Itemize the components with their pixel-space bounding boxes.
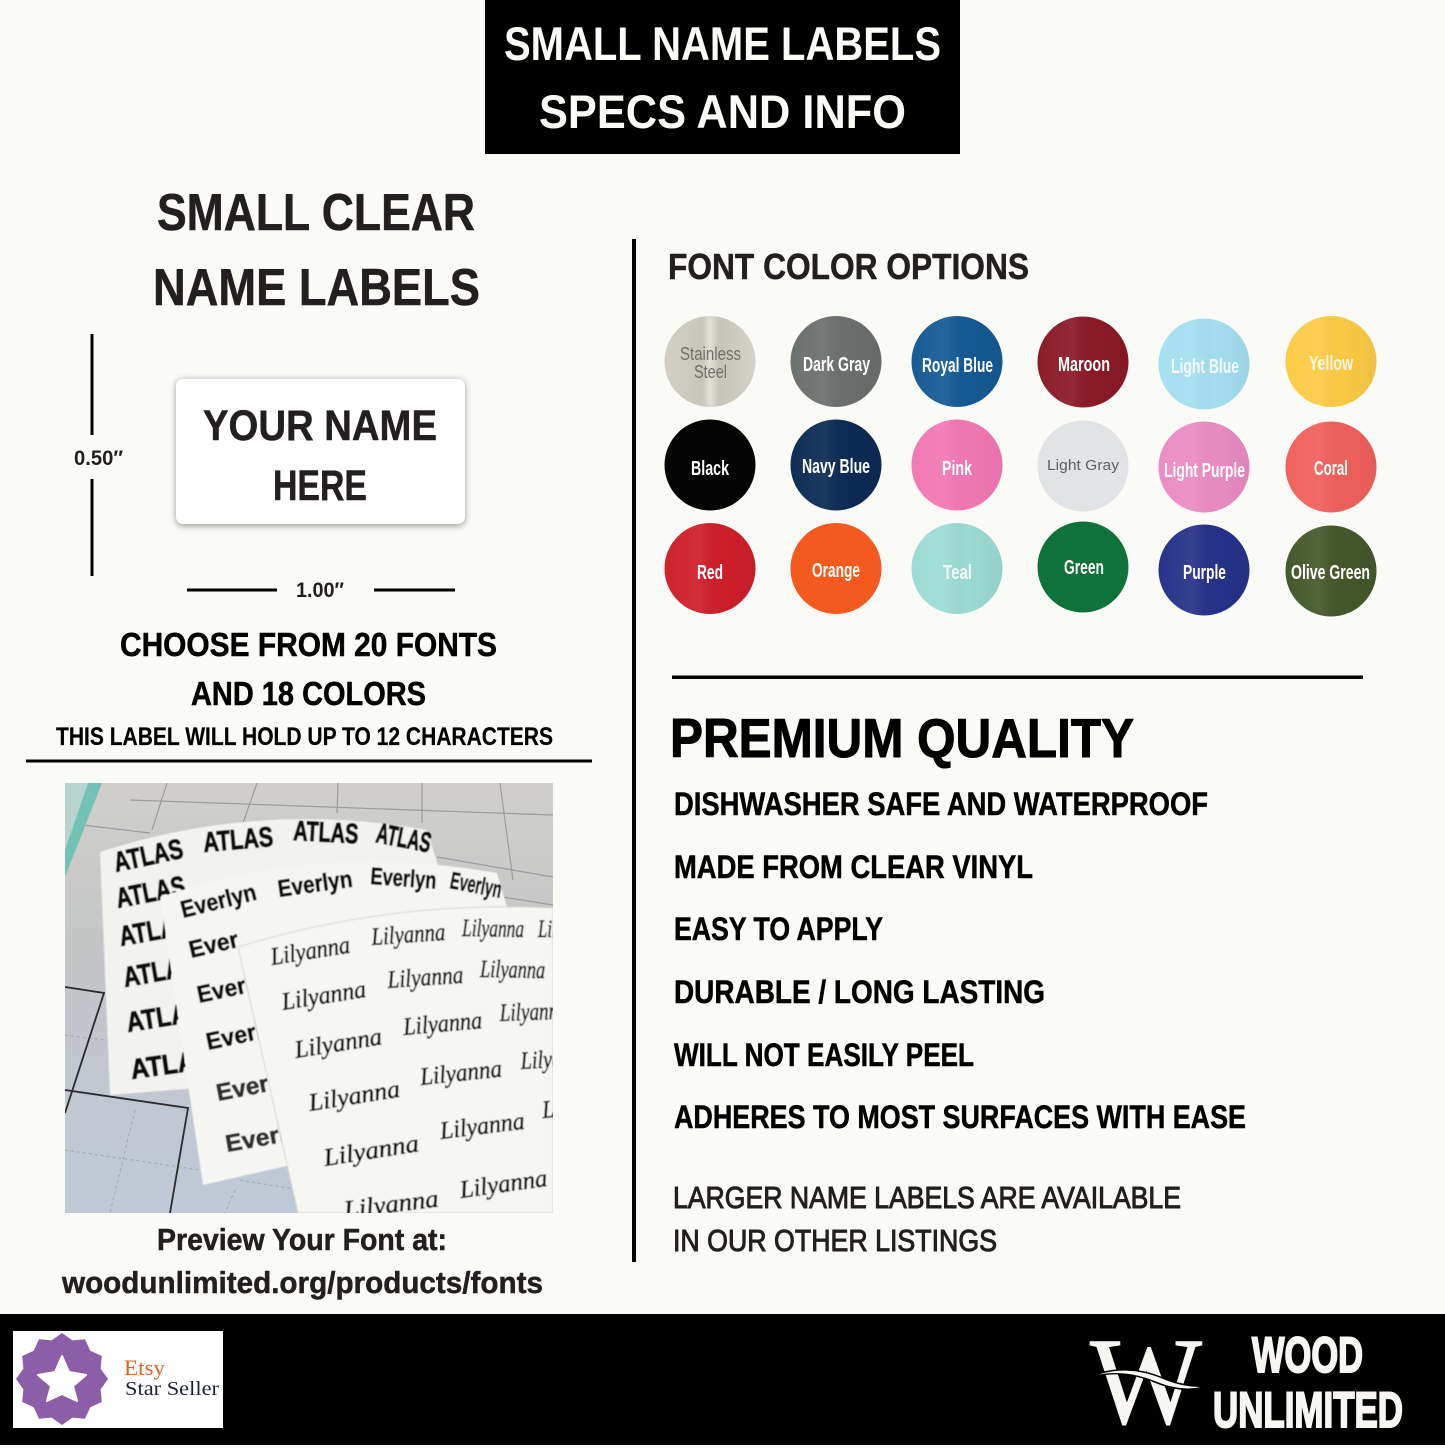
- swatch: Coral: [1286, 422, 1376, 512]
- ruler corner: [65, 783, 102, 877]
- swatch: Stainless Steel: Stainless: [680, 344, 741, 364]
- wood unlimited logo: WOOD: [1252, 1327, 1363, 1383]
- sheet: Everlyn: Everlyn: [195, 965, 280, 1009]
- sheet: ATLAS: ATLAS: [374, 817, 434, 858]
- sheet: Everlyn: Ever: [186, 926, 241, 964]
- sheet: Everlyn: Everlyn: [276, 866, 354, 903]
- swatch: Olive Green: Olive Green: [1291, 562, 1370, 584]
- swatch: Purple: Purple: [1183, 562, 1226, 584]
- swatch: Green: [1038, 522, 1128, 612]
- sheet: Everlyn: [159, 864, 507, 1186]
- icon: W monogram with swoosh: W: [1090, 1313, 1202, 1448]
- etsy star seller badge: Star Seller: [125, 1378, 219, 1400]
- sheet: Lilyanna: Lilyanna: [386, 962, 464, 994]
- larger labels note: [673, 1180, 1181, 1258]
- width dimension 1.00 inch: [187, 579, 455, 602]
- font preview link text: Preview Your Font at:: [157, 1222, 447, 1257]
- swatch: Royal Blue: Royal Blue: [922, 355, 993, 377]
- left heading: SMALL CLEAR: [157, 184, 475, 242]
- title banner: [485, 0, 960, 154]
- height dimension 0.50 inch: [74, 334, 123, 576]
- larger labels note: LARGER NAME LABELS ARE AVAILABLE: [673, 1180, 1181, 1215]
- label sample card: [176, 379, 465, 526]
- swatch: Yellow: Yellow: [1309, 353, 1353, 375]
- larger labels note: IN OUR OTHER LISTINGS: [673, 1223, 997, 1258]
- icon: purple star badge: [16, 1333, 108, 1425]
- sheet: Lilyanna: Lilyanna: [519, 1044, 593, 1075]
- sheet: ATLAS: ATLAS: [293, 815, 359, 849]
- label sample card: YOUR NAME: [203, 402, 437, 450]
- feature list: EASY TO APPLY: [674, 911, 883, 947]
- swatch: Teal: Teal: [943, 562, 972, 584]
- swatch: Purple: [1158, 524, 1250, 616]
- sheet: Everlyn: Everlyn: [178, 879, 259, 924]
- sheet: Lilyanna: Lilyanna: [479, 956, 545, 984]
- fonts and colors text: [56, 626, 553, 751]
- feature list: MADE FROM CLEAR VINYL: [674, 849, 1033, 885]
- label sample card: HERE: [273, 462, 367, 510]
- fonts and colors text: AND 18 COLORS: [191, 675, 426, 712]
- swatch: Black: [664, 420, 756, 510]
- font color heading: FONT COLOR OPTIONS: [668, 246, 1029, 287]
- swatch: Light Purple: [1158, 422, 1250, 512]
- swatch: Teal: [912, 523, 1002, 614]
- sheet: ATLAS: ATLAS: [117, 909, 193, 952]
- sheet: Lilyanna: Lilyanna: [537, 916, 598, 943]
- etsy star seller badge: Etsy: [124, 1355, 165, 1380]
- left heading: NAME LABELS: [153, 259, 480, 317]
- sheet: ATLAS: ATLAS: [202, 821, 274, 858]
- swatch: Black: Black: [691, 458, 730, 480]
- swatch: Orange: Orange: [812, 560, 860, 582]
- swatch: Navy Blue: [790, 420, 882, 510]
- sheet: ATLAS: ATLAS: [121, 950, 199, 993]
- title line 1: SMALL NAME LABELS: [504, 17, 941, 70]
- sheet: ATLAS: ATLAS: [129, 1043, 214, 1085]
- sheet: Lilyanna: Lilyanna: [499, 998, 568, 1027]
- sheet: Everlyn: Everlyn: [370, 863, 437, 895]
- footer bar: [0, 1313, 1445, 1448]
- swatch: Navy Blue: Navy Blue: [802, 456, 870, 478]
- swatch: Dark Gray: Dark Gray: [803, 354, 871, 376]
- feature list: WILL NOT EASILY PEEL: [674, 1037, 974, 1073]
- height dimension 0.50 inch: 0.50″: [74, 447, 123, 470]
- swatch: Red: [664, 523, 756, 614]
- sheet: Everlyn: Everlyn: [204, 1012, 291, 1056]
- swatch: Olive Green: [1286, 526, 1376, 616]
- sheet: Lilyanna: Lilyanna: [370, 919, 446, 951]
- sheet: Lilyanna: Lilyanna: [401, 1007, 483, 1041]
- font preview link text: [61, 1222, 543, 1300]
- sheet: Everlyn: Everlyn: [214, 1064, 306, 1107]
- sheet: ATLAS: ATLAS: [113, 870, 188, 914]
- swatch: Coral: Coral: [1314, 458, 1348, 480]
- color swatches: [664, 316, 1376, 616]
- sheet: Lilyanna: Lilyanna: [268, 932, 352, 971]
- sheet: Lilyanna: Lilyanna: [292, 1023, 384, 1064]
- swatch: Stainless Steel: Steel: [694, 362, 727, 382]
- swatch: Light Gray: Light Gray: [1047, 457, 1120, 474]
- swatch: Maroon: Maroon: [1058, 354, 1110, 376]
- sheet: ATLAS: [100, 818, 438, 1096]
- fonts and colors text: CHOOSE FROM 20 FONTS: [120, 626, 497, 663]
- feature list: DURABLE / LONG LASTING: [674, 974, 1045, 1010]
- left heading: [153, 184, 480, 317]
- swatch: Pink: [912, 420, 1002, 510]
- swatch: Green: Green: [1064, 557, 1104, 579]
- swatch: Maroon: [1038, 316, 1128, 408]
- sheet: Lilyanna: Lilyanna: [279, 976, 368, 1016]
- swatch: Red: Red: [697, 562, 723, 584]
- swatch: Dark Gray: [790, 316, 882, 407]
- sheet: ATLAS: ATLAS: [124, 995, 206, 1038]
- swatch: Light Purple: Light Purple: [1164, 460, 1245, 482]
- swatch: Orange: [790, 523, 882, 614]
- sheet: ATLAS: ATLAS: [111, 833, 186, 878]
- feature list: [674, 786, 1246, 1135]
- feature list: ADHERES TO MOST SURFACES WITH EASE: [674, 1099, 1246, 1135]
- photo of label sheets: [65, 783, 553, 1213]
- width dimension 1.00 inch: 1.00″: [296, 579, 344, 602]
- sheet: Everlyn: Everlyn: [448, 867, 504, 904]
- etsy star seller badge: [13, 1331, 223, 1428]
- sheet: Lilyanna: Lilyanna: [306, 1076, 402, 1117]
- swatch: Light Blue: [1158, 318, 1250, 410]
- title line 2: SPECS AND INFO: [539, 85, 906, 138]
- swatch: Royal Blue: [912, 316, 1002, 407]
- swatch: Stainless Steel: [664, 316, 756, 407]
- font preview link text: woodunlimited.org/products/fonts: [61, 1265, 543, 1300]
- sheet: Lilyanna: Lilyanna: [457, 1165, 549, 1204]
- sheet: Lilyanna: Lilyanna: [321, 1130, 421, 1172]
- sheet: Lilyanna: Lilyanna: [461, 915, 524, 943]
- swatch: Light Gray: [1038, 420, 1128, 512]
- fonts and colors text: THIS LABEL WILL HOLD UP TO 12 CHARACTERS: [56, 723, 553, 751]
- sheet: Lilyanna: Lilyanna: [341, 1186, 440, 1224]
- sheet: Lilyanna: [238, 906, 553, 1213]
- sheet: Lilyanna: Lilyanna: [437, 1108, 526, 1145]
- swatch: Yellow: [1286, 316, 1376, 407]
- premium quality heading: PREMIUM QUALITY: [670, 707, 1134, 769]
- swatch: Light Blue: Light Blue: [1171, 356, 1239, 378]
- sheet: Lilyanna: Lilyanna: [540, 1090, 619, 1124]
- sheet: Everlyn: Everlyn: [223, 1116, 317, 1158]
- wood unlimited logo: [1089, 1313, 1403, 1448]
- sheet: Lilyanna: Lilyanna: [418, 1056, 503, 1091]
- swatch: Pink: Pink: [942, 458, 973, 480]
- feature list: DISHWASHER SAFE AND WATERPROOF: [674, 786, 1208, 822]
